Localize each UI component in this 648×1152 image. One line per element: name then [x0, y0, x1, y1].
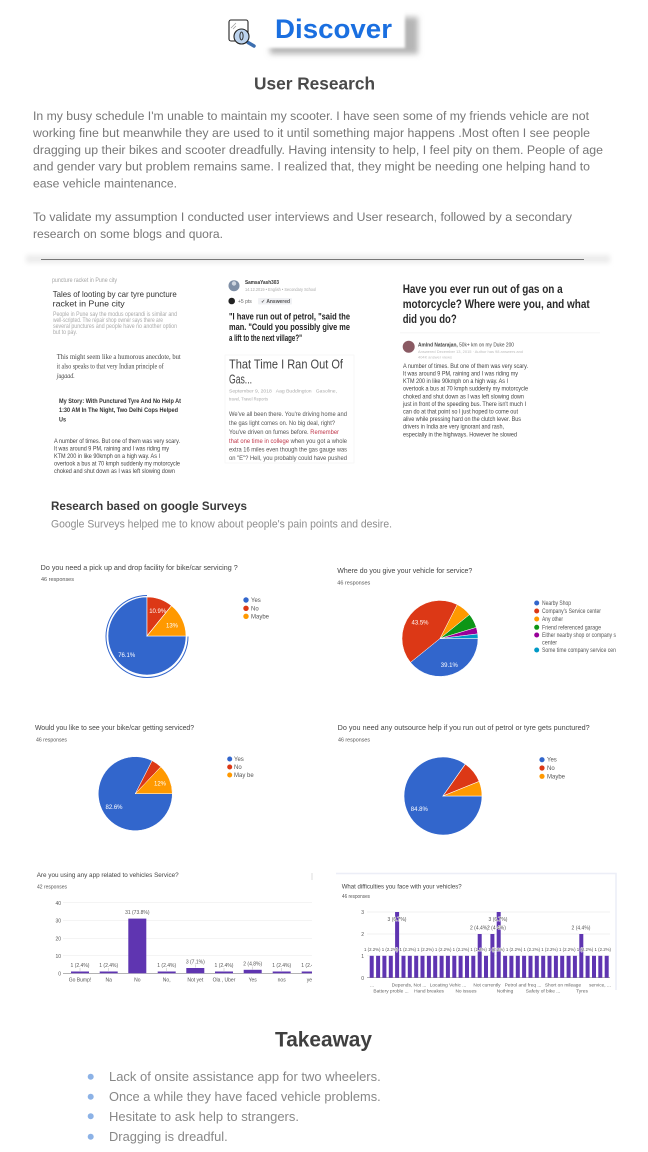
icon: author avatar — [403, 341, 415, 353]
text block: surveys description: Google Surveys helped me to know about people's pain points and desire. — [51, 518, 392, 530]
answer badges: ✓ Answered — [261, 299, 290, 305]
pie chart: pick up and drop facility — [41, 565, 270, 677]
panel: petrol answer and blog screenshots — [225, 280, 354, 463]
legend — [243, 597, 270, 620]
answer text — [402, 363, 528, 438]
bar chart: app usage: No, — [163, 978, 171, 984]
bar chart: vehicle difficulties — [336, 874, 616, 994]
bar chart: app usage: yes — [307, 978, 315, 984]
answer text: choked and shut down as I was left slowing down — [403, 393, 524, 400]
text block: research introduction: To validate my assumption I conducted user interviews and User research, followed by a secondary — [33, 210, 573, 224]
icon: user avatar — [228, 280, 240, 291]
blog excerpt: on "E"? Hell, you probably could have pushed — [229, 455, 347, 462]
serif quote: jugaad. — [56, 372, 75, 380]
bar chart: app usage: 1 (2.4%) — [71, 963, 90, 969]
bar chart: vehicle difficulties: 46 responses — [342, 894, 370, 900]
legend: Yes — [251, 598, 261, 604]
blog title — [229, 356, 343, 386]
heading: Discover with shadow box — [258, 8, 418, 54]
bar chart: app usage: 42 responses — [37, 884, 67, 890]
x axis labels: Short on mileage — [545, 982, 581, 988]
legend — [227, 756, 254, 779]
blog excerpt: We've all been there. You're driving home and — [229, 411, 347, 418]
pie chart: outsource help: 84.8% — [411, 807, 428, 813]
pie chart: where vehicle is serviced — [337, 568, 616, 676]
legend — [539, 757, 566, 780]
answer text: A number of times. But one of them was very scary. — [403, 363, 528, 370]
text block: research introduction: ease vehicle maintenance. — [33, 176, 177, 190]
x axis labels: Safety of bike ... — [526, 988, 560, 994]
bold story title: 1:30 AM In The Night, Two Delhi Cops Helped — [59, 407, 178, 414]
legend: center — [542, 640, 557, 646]
panel: petrol answer and blog screenshots: SamsaYash303 — [245, 280, 279, 286]
question heading: did you do? — [403, 314, 457, 326]
story excerpt: choked and shut down as I was left slowing down — [54, 468, 175, 475]
bold story title — [59, 398, 182, 424]
pie chart: where vehicle is serviced: 39.1% — [441, 663, 458, 669]
heading: Discover with shadow box: Discover — [275, 14, 392, 44]
bold quote: man. "Could you possibly give me — [229, 322, 350, 332]
blog title: Gas... — [229, 372, 252, 386]
takeaway item 2: Once a while they have faced vehicle problems. — [109, 1090, 381, 1104]
pie chart: where vehicle is serviced: Where do you give your vehicle for service? — [337, 568, 472, 575]
legend: Nearby Shop — [542, 601, 572, 607]
bold story title: Us — [59, 416, 66, 424]
bar chart: app usage: 1 (2.4%) — [99, 963, 118, 969]
bar chart: app usage: Ola , Uber — [213, 978, 236, 984]
bar chart: vehicle difficulties: 3 — [361, 910, 364, 916]
legend: No — [234, 765, 242, 771]
legend: Any other — [542, 617, 563, 623]
legend: No — [547, 766, 555, 772]
pie chart: where vehicle is serviced: 46 responses — [337, 580, 371, 586]
icon: magnifying glass over document — [229, 20, 254, 46]
answer text: overtook a bus at 70 kmph suddenly my motorcycle — [403, 386, 528, 393]
legend: No — [251, 606, 259, 612]
bar chart: app usage: Na — [105, 978, 112, 984]
takeaway item 1: Lack of onsite assistance app for two wheelers. — [109, 1070, 381, 1084]
serif quote: it also speaks to that very Indian principle of — [57, 362, 164, 370]
heading: Takeaway: Takeaway — [275, 1029, 372, 1052]
legend: Friend referenced garage — [542, 625, 602, 631]
takeaway item 4: Dragging is dreadful. — [109, 1130, 228, 1144]
bar chart: app usage: Go Bump! — [69, 978, 91, 984]
pie chart: pick up and drop facility: 10.9% — [149, 609, 167, 615]
article summary: People in Pune say the modus operandi is similar and — [53, 312, 177, 318]
pie chart: outsource help — [338, 725, 590, 835]
question heading: Have you ever run out of gas on a — [403, 284, 563, 296]
story excerpt: A number of times. But one of them was very scary. — [54, 438, 180, 445]
x axis labels — [370, 982, 611, 994]
story excerpt — [54, 438, 180, 475]
bar chart: app usage: 1 (2.4%) — [272, 963, 291, 969]
x axis labels: service, ... — [589, 982, 611, 988]
serif quote: This might seem like a humorous anecdote, but — [57, 353, 181, 361]
data labels: 3 (6.7%) — [388, 917, 407, 923]
legend: Yes — [234, 757, 244, 763]
blog excerpt: You've driven on fumes before. Remember — [229, 429, 340, 436]
x axis labels: ... — [370, 984, 374, 988]
data labels: 1 (2.2%) 1 (2.2%) 1 (2.2%) 1 (2.2%) 1 (2.2%) 1 (2.2%) 1 (2.2%) 1 (2.2%) 1 (2.2%) 1 (2.2%) 1 (2.2%) 1 (2.2%) 1 (2.2%) 1 (2.2%) — [364, 947, 611, 952]
data labels: 2 (4.4%) — [470, 926, 489, 932]
heading: User Research: User Research — [254, 74, 375, 94]
text block: research introduction — [32, 109, 603, 241]
blog excerpt: extra 16 miles even though the gas gauge was — [229, 446, 347, 454]
article summary: but to pay. — [53, 330, 77, 336]
legend: Maybe — [251, 614, 270, 620]
bar chart: app usage: Not yet — [187, 978, 204, 984]
text block: research introduction: and gender vary but problem remains same. I realized that, they might be needing one helping hand to — [33, 160, 590, 174]
answer text: can do at that point so I just hoped to come out — [403, 408, 518, 415]
question heading: motorcycle? Where were you, and what — [403, 299, 590, 311]
answer text: It was around 9 PM, raining and I was riding my — [403, 371, 519, 378]
pie chart: seeing vehicle serviced: 46 responses — [36, 738, 67, 744]
legend: Company's Service center — [542, 609, 601, 615]
panel: petrol answer and blog screenshots: 14.12.2019 • English • Secondary School — [245, 287, 316, 292]
legend: Either nearby shop or company s — [542, 633, 616, 639]
panel: Quora motorcycle question screenshot — [400, 284, 600, 438]
story excerpt: It was around 9 PM, raining and I was riding my — [54, 446, 170, 452]
article summary: several punctures and people have no another option — [53, 324, 177, 330]
pie chart: seeing vehicle serviced — [35, 725, 254, 831]
answer text: KTM 200 in like 90kmph on a high way. As I — [403, 378, 508, 385]
legend: May be — [234, 773, 254, 779]
answer text: alive while pressing hard on the clutch lever. Bus — [403, 416, 521, 423]
bar chart: vehicle difficulties: 1 — [361, 954, 364, 960]
panel: petrol answer and blog screenshots: September 9, 2018 Aag Buddington Gasoline, — [229, 388, 337, 394]
bar chart: app usage: 1 (2.4%) — [301, 963, 320, 969]
x axis labels: Not currently — [473, 982, 501, 988]
article title: racket in Pune city — [53, 298, 125, 308]
bar chart: app usage: 31 (73.8%) — [125, 910, 150, 916]
pie chart: pick up and drop facility: 76.1% — [118, 653, 136, 659]
answer text: just in front of the speeding bus. There isn't much I — [402, 401, 526, 408]
bar chart: app usage — [37, 872, 320, 984]
bar chart: app usage: Are you using any app related to vehicles Service? — [37, 872, 179, 879]
bar chart: vehicle difficulties: 0 — [361, 976, 364, 982]
bold quote: "I have run out of petrol, "said the — [229, 312, 350, 322]
bar chart: app usage: 40 — [55, 901, 61, 907]
bar chart: app usage: 3 (7.1%) — [186, 960, 205, 966]
text block: research introduction: working fine but meanwhile they are used to it until something major happens .Most often I see people — [32, 126, 590, 140]
pie chart: outsource help: Do you need any outsource help if you run out of petrol or tyre gets punctured? — [338, 725, 590, 732]
bold quote: a lift to the next village?" — [229, 333, 302, 343]
bar chart: vehicle difficulties: What difficulties you face with your vehicles? — [342, 884, 462, 890]
pie chart: outsource help: 46 responses — [338, 738, 370, 744]
heading: Research based on google Surveys: Research based on google Surveys — [51, 499, 247, 513]
bar chart: app usage: 2 (4.8%) — [243, 962, 262, 968]
bold story title: My Story: With Punctured Tyre And No Help At — [59, 398, 182, 405]
x axis labels: Tyres — [576, 988, 588, 994]
text block: research introduction: dragging up their bikes and scooter dreadfully. Having intensity to help, I feel pity on them. People of age — [33, 143, 603, 157]
article title — [53, 289, 177, 308]
blog excerpt: that one time in college when you got a whole — [229, 438, 347, 445]
data labels — [364, 917, 611, 952]
pie chart: seeing vehicle serviced: Would you like to see your bike/car getting serviced? — [35, 725, 194, 732]
data labels: 2 (4.4%) — [572, 926, 591, 932]
panel: Quora motorcycle question screenshot: Amlnd Natarajan, 50k+ km on my Duke 200 — [418, 342, 514, 348]
x axis labels: Battery proble ... — [373, 988, 409, 994]
x axis labels: Depends, Not ... — [392, 982, 426, 988]
question heading — [403, 284, 590, 326]
article summary: well-scripted. The repair shop owner says there are — [52, 318, 164, 324]
pie chart: seeing vehicle serviced: 12% — [154, 781, 167, 787]
serif quote — [56, 353, 181, 380]
answer badges: +5 pts — [238, 299, 252, 305]
bar chart: app usage: nos — [278, 978, 286, 984]
panel: puncture racket article screenshots: puncture racket in Pune city — [52, 278, 117, 284]
story excerpt: overtook a bus at 70 kmph suddenly my motorcycle — [54, 460, 180, 468]
legend: Some time company service cen — [542, 648, 616, 654]
pie chart: pick up and drop facility: Do you need a pick up and drop facility for bike/car servicing ? — [41, 565, 238, 572]
panel: Quora motorcycle question screenshot: Answered December 13, 2015 · Author has 98 answers and — [418, 349, 523, 354]
bar chart: app usage: 30 — [55, 918, 61, 924]
panel: petrol answer and blog screenshots: travel, Travel Reports — [229, 396, 269, 402]
bar chart: app usage: Yes — [249, 978, 257, 984]
panel: puncture racket article screenshots — [52, 278, 182, 475]
pie chart: pick up and drop facility: 46 responses — [41, 577, 74, 583]
blog excerpt: the gas light comes on. No big deal, right? — [229, 420, 335, 427]
pie chart: pick up and drop facility: 13% — [166, 624, 179, 630]
data labels: 3 (6.7%) — [489, 917, 508, 923]
x axis labels: Petrol and freq ... — [505, 982, 541, 988]
legend: Maybe — [547, 774, 566, 780]
bar chart: app usage: 1 (2.4%) — [157, 963, 176, 969]
panel: Quora motorcycle question screenshot: 404K answer views — [418, 354, 452, 360]
article summary — [52, 312, 177, 336]
article title: Tales of looting by car tyre puncture — [53, 289, 177, 299]
x axis labels: No issues — [455, 988, 477, 994]
legend — [534, 600, 616, 654]
legend: Yes — [547, 758, 557, 764]
answer text: especially in the highways. However he slowed — [403, 431, 517, 438]
text block: research introduction: research on some blogs and quora. — [33, 227, 223, 241]
data labels: 2 (4.4%) — [487, 926, 506, 932]
bold quote — [229, 312, 350, 343]
text block: research introduction: In my busy schedule I'm unable to maintain my scooter. I have seen some of my friends vehicle are not — [33, 109, 590, 123]
bar chart: vehicle difficulties: 2 — [361, 932, 364, 938]
takeaway item 3: Hesitate to ask help to strangers. — [109, 1110, 299, 1124]
bar chart: app usage: 0 — [58, 972, 61, 978]
answer badges — [228, 298, 292, 305]
x axis labels: Nothing — [497, 988, 514, 994]
answer text: drivers in India are very ignorant and rash, — [403, 424, 504, 431]
blog title: That Time I Ran Out Of — [229, 356, 343, 372]
blog excerpt — [229, 411, 347, 462]
pie chart: where vehicle is serviced: 43.5% — [411, 620, 429, 626]
x axis labels: Hand breakes — [414, 988, 445, 994]
x axis labels: Locating Vehic ... — [430, 982, 466, 988]
bar chart: app usage: No — [134, 978, 141, 984]
bar chart: app usage: 1 (2.4%) — [215, 963, 234, 969]
bar chart: app usage: 20 — [55, 936, 61, 942]
story excerpt: KTM 200 in like 90kmph on a high way. As I — [54, 453, 160, 460]
pie chart: seeing vehicle serviced: 82.6% — [105, 805, 123, 811]
bar chart: app usage: 10 — [55, 954, 61, 960]
list: takeaways — [88, 1070, 381, 1144]
